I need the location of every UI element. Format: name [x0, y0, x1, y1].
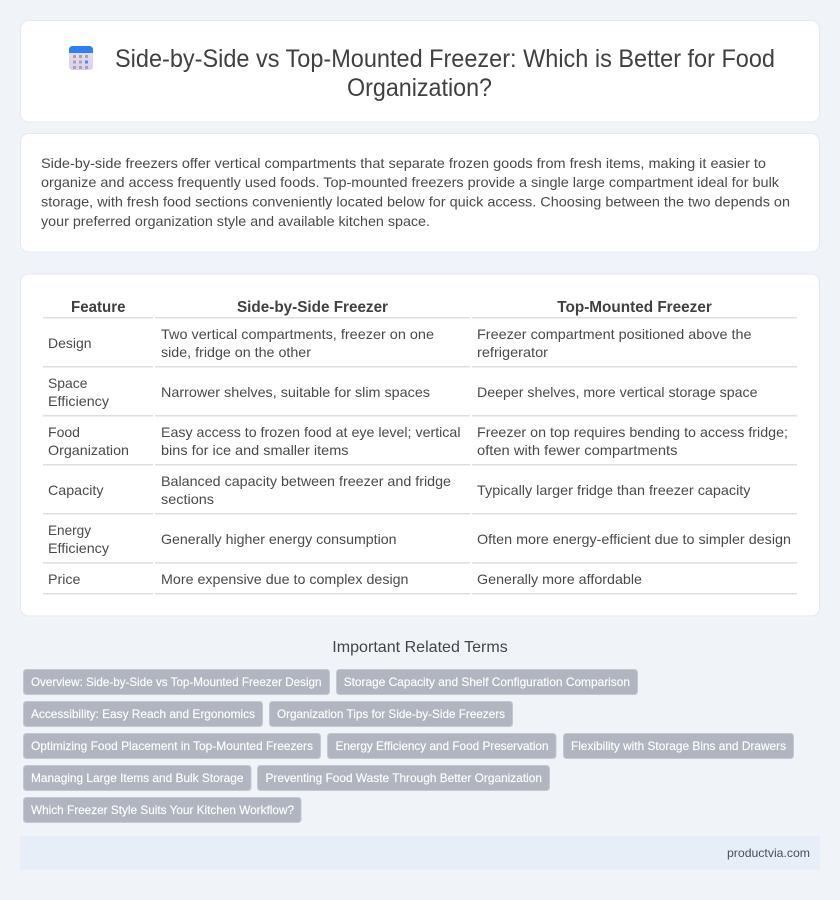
chip: food waste: Preventing Food Waste Through Better Organization — [266, 771, 542, 785]
row: food organization: Freezer on top requires bending to access fridge; — [477, 424, 788, 440]
row: food organization: often with fewer compartments — [477, 442, 678, 458]
footer — [20, 836, 820, 870]
row: space efficiency: Deeper shelves, more vertical storage space — [477, 384, 758, 400]
chip: large items — [24, 766, 251, 790]
row: design: side, fridge on the other — [161, 344, 311, 360]
row: capacity: Typically larger fridge than freezer capacity — [477, 482, 750, 498]
row: energy efficiency: Often more energy-efficient due to simpler design — [477, 531, 791, 547]
row: price: Price — [48, 571, 81, 587]
table header row: Feature — [71, 299, 126, 316]
chip: kitchen workflow — [24, 798, 301, 822]
row: energy efficiency: Generally higher energy consumption — [161, 531, 396, 547]
row: food organization: Easy access to frozen food at eye level; vertical — [161, 424, 461, 440]
row: design: Freezer compartment positioned above the — [477, 326, 752, 342]
chip: overview: Overview: Side-by-Side vs Top-Mounted Freezer Design — [31, 675, 322, 689]
row: food organization — [48, 424, 788, 458]
intro text block: Side-by-side freezers offer vertical compartments that separate frozen goods from fresh items, making it easier to — [41, 155, 766, 171]
row: food organization: Organization — [48, 442, 129, 458]
chip: optimizing placement: Optimizing Food Placement in Top-Mounted Freezers — [31, 739, 313, 753]
title — [115, 45, 775, 102]
row: capacity — [48, 473, 750, 507]
chip: energy efficiency: Energy Efficiency and Food Preservation — [336, 739, 548, 753]
chip: kitchen workflow: Which Freezer Style Suits Your Kitchen Workflow? — [31, 803, 294, 817]
row: food organization: Food — [48, 424, 80, 440]
chip: energy efficiency — [328, 734, 556, 758]
table header row: Top-Mounted Freezer — [557, 299, 712, 316]
chip: organization tips — [270, 702, 512, 726]
chip: organization tips: Organization Tips for Side-by-Side Freezers — [277, 707, 505, 721]
chip: large items: Managing Large Items and Bulk Storage — [31, 771, 244, 785]
row: space efficiency: Space — [48, 375, 88, 391]
title: Organization? — [347, 74, 492, 102]
title: Side-by-Side vs Top-Mounted Freezer: Which is Better for Food — [115, 45, 775, 73]
chip: accessibility: Accessibility: Easy Reach and Ergonomics — [31, 707, 255, 721]
row: price: Generally more affordable — [477, 571, 642, 587]
row: space efficiency: Efficiency — [48, 393, 109, 409]
row: design: refrigerator — [477, 344, 548, 360]
chip: overview — [24, 670, 330, 694]
panel: comparison table — [20, 274, 820, 616]
row: capacity: sections — [161, 491, 214, 507]
row: design — [48, 326, 752, 360]
panel: intro — [20, 134, 820, 252]
icon: calendar grid — [69, 46, 93, 70]
intro text block: your preferred organization style and available kitchen space. — [41, 213, 430, 229]
chip: food waste — [258, 766, 550, 790]
row: space efficiency — [48, 375, 758, 409]
heading: important related terms: Important Related Terms — [332, 639, 508, 656]
related term chips — [24, 670, 794, 822]
intro text block: organize and access frequently used foods. Top-mounted freezers provide a single large compartment ideal for bulk — [41, 174, 780, 190]
row: capacity: Balanced capacity between freezer and fridge — [161, 473, 451, 489]
chip: flexibility: Flexibility with Storage Bins and Drawers — [571, 739, 786, 753]
table header row: Side-by-Side Freezer — [237, 299, 388, 316]
row: design: Two vertical compartments, freezer on one — [161, 326, 434, 342]
row: energy efficiency: Efficiency — [48, 540, 109, 556]
chip: storage capacity — [336, 670, 638, 694]
row: price — [48, 571, 642, 587]
footer source: productvia.com — [727, 846, 810, 860]
header panel — [20, 20, 820, 122]
chip: storage capacity: Storage Capacity and Shelf Configuration Comparison — [344, 675, 630, 689]
row: capacity: Capacity — [48, 482, 104, 498]
row: energy efficiency: Energy — [48, 522, 91, 538]
chip: optimizing placement — [24, 734, 320, 758]
intro text block — [41, 155, 790, 229]
chip: flexibility — [564, 734, 794, 758]
intro text block: storage, with fresh food sections conveniently located below for quick access. Choosing between the two depends on — [41, 194, 790, 210]
row: energy efficiency — [48, 522, 791, 556]
row: price: More expensive due to complex design — [161, 571, 408, 587]
row: food organization: bins for ice and smaller items — [161, 442, 348, 458]
row: space efficiency: Narrower shelves, suitable for slim spaces — [161, 384, 430, 400]
row: design: Design — [48, 335, 92, 351]
table header row — [71, 299, 712, 316]
chip: accessibility — [24, 702, 262, 726]
